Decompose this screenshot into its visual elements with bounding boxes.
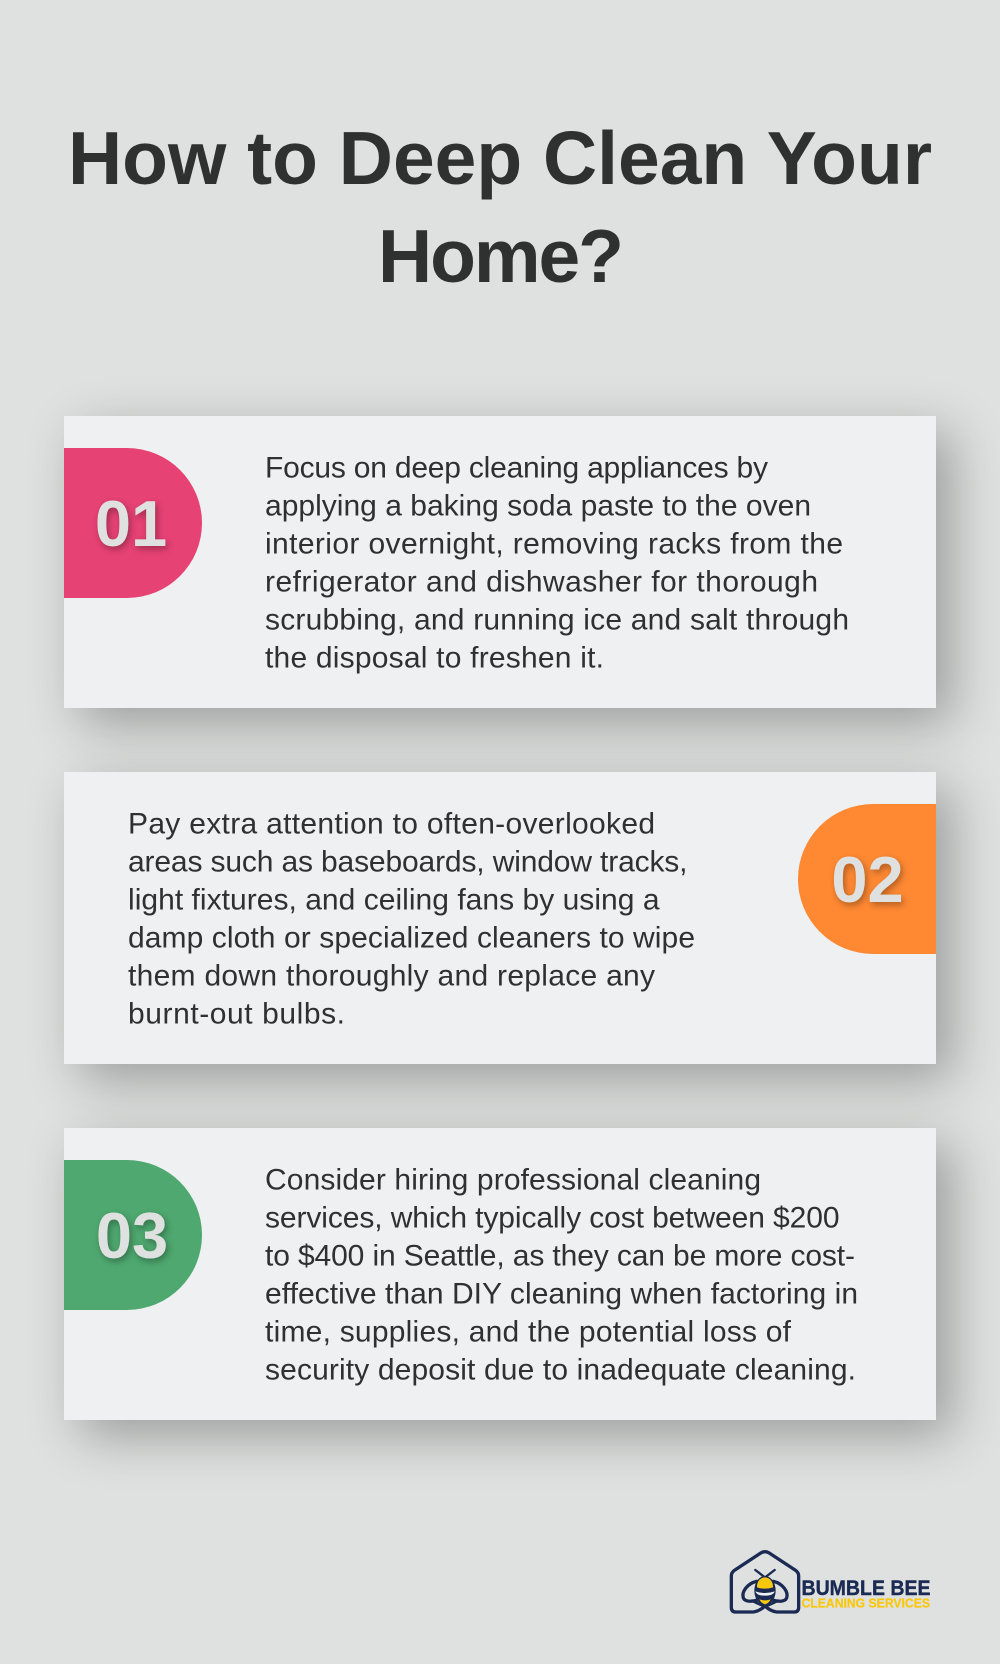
text: step 02 description: light fixtures, and ceiling fans by using a xyxy=(128,884,660,916)
text: step 03 description: security deposit due to inadequate cleaning. xyxy=(265,1354,856,1386)
text: step 03 description: services, which typically cost between $200 xyxy=(265,1202,840,1234)
text: step 01 description: scrubbing, and running ice and salt through xyxy=(265,604,849,636)
panel: step 02 xyxy=(64,772,936,1064)
text: step 01 description: the disposal to freshen it. xyxy=(265,642,604,674)
icon: house with bee xyxy=(731,1552,799,1612)
text: step 02 description: Pay extra attention to often-overlooked xyxy=(128,808,655,840)
text: step 02 description: areas such as baseboards, window tracks, xyxy=(128,846,688,878)
text: step 03 description: Consider hiring professional cleaning xyxy=(265,1164,761,1196)
text: step 01 description xyxy=(265,452,849,674)
text: step 02 description: damp cloth or specialized cleaners to wipe xyxy=(128,922,695,954)
text: step 01 description: applying a baking soda paste to the oven xyxy=(265,490,811,522)
number: 02: 02 xyxy=(831,843,904,916)
badge: 01 xyxy=(64,448,202,598)
text: step 01 description: Focus on deep cleaning appliances by xyxy=(265,452,768,484)
text: step 03 description: effective than DIY cleaning when factoring in xyxy=(265,1278,858,1310)
title: Home? xyxy=(378,214,624,298)
text: step 01 description: refrigerator and dishwasher for thorough xyxy=(265,566,818,598)
panel: step 01 xyxy=(64,416,936,708)
logo text: BUMBLE BEE xyxy=(802,1576,930,1600)
text: step 02 description: them down thoroughly and replace any xyxy=(128,960,655,992)
title xyxy=(68,116,932,298)
text: step 03 description xyxy=(265,1164,858,1386)
text: step 03 description: time, supplies, and the potential loss of xyxy=(265,1316,792,1348)
number: 03: 03 xyxy=(96,1199,168,1272)
text: step 01 description: interior overnight, removing racks from the xyxy=(265,528,843,560)
logo text xyxy=(802,1576,930,1611)
title: How to Deep Clean Your xyxy=(68,116,932,200)
badge: 03 xyxy=(64,1160,202,1310)
text: step 03 description: to $400 in Seattle, as they can be more cost- xyxy=(265,1240,855,1272)
panel: step 03 xyxy=(64,1128,936,1420)
logo: Bumble Bee Cleaning Services xyxy=(730,1550,930,1614)
logo text: CLEANING SERVICES xyxy=(802,1597,930,1611)
number: 01: 01 xyxy=(95,487,167,560)
text: step 02 description: burnt-out bulbs. xyxy=(128,998,345,1030)
text: step 02 description xyxy=(128,808,695,1030)
badge: 02 xyxy=(798,804,936,954)
